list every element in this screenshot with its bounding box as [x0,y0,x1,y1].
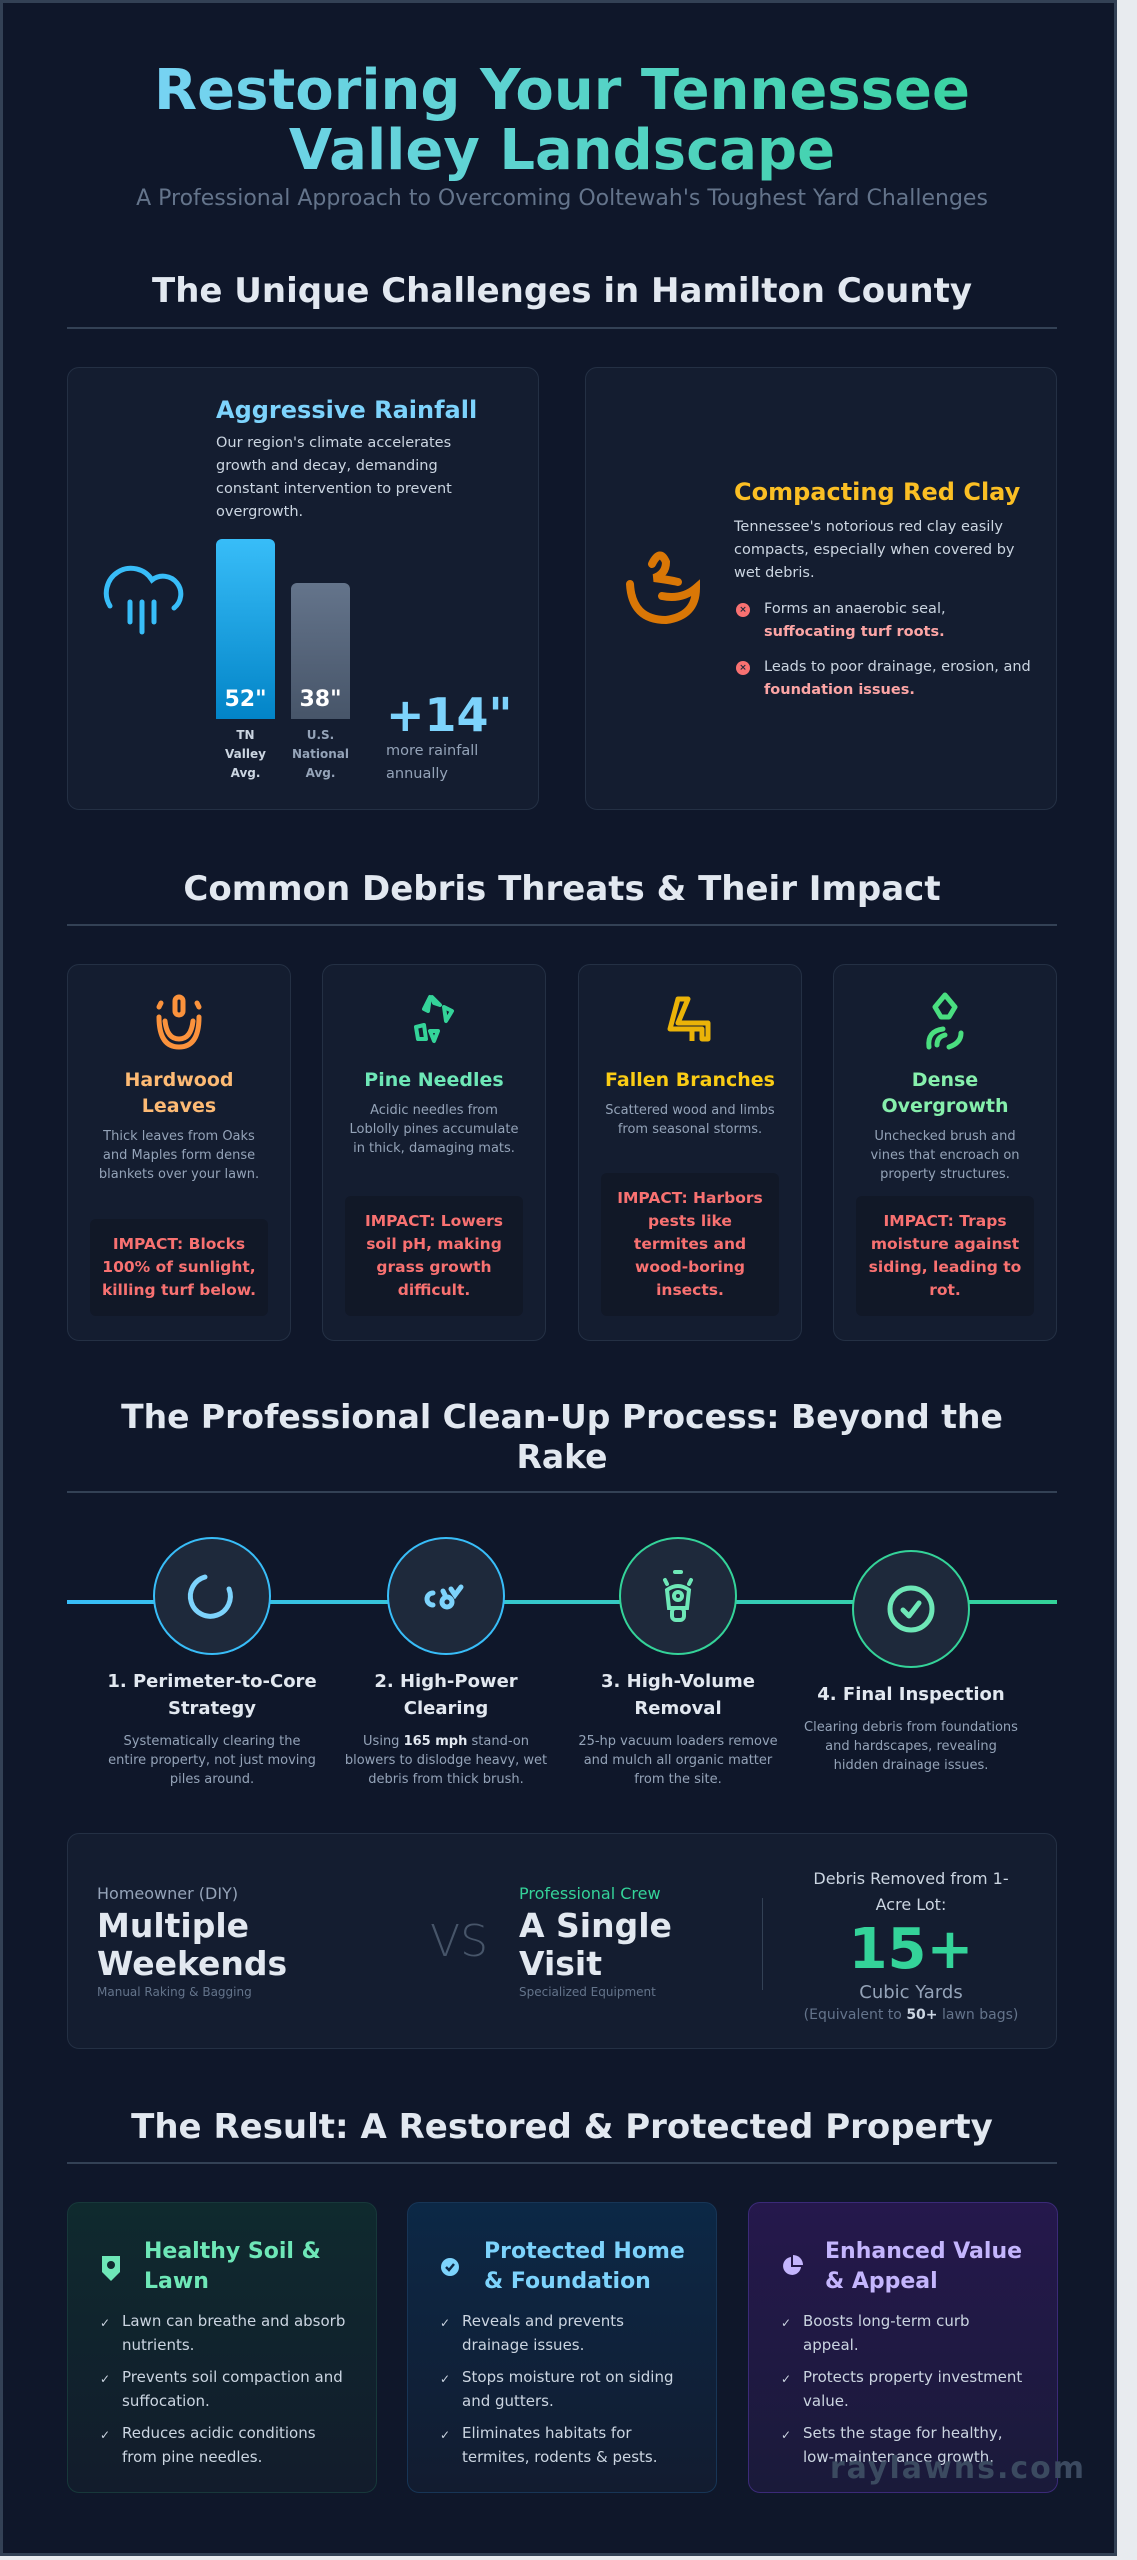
step 3 text: from the site. [634,1772,722,1787]
stat: 15+ cubic yards [804,1869,1018,2023]
card: dense overgrowth: Dense [912,1069,978,1091]
card: hardwood leaves: Thick leaves from Oaks and Maples form dense blankets over your lawn. [99,1129,259,1182]
DIY block: Weekends [97,1944,287,1983]
bar chart: 38" [299,687,342,712]
title: Valley Landscape [289,118,835,183]
heading: compacting red clay: Compacting Red Clay [734,478,1020,506]
list: clay effects [736,601,1031,698]
card: protected home: Eliminates habitats for termites, rodents & pests. [462,2424,657,2466]
card: enhanced value: Protects property investment value. [803,2368,1022,2410]
card: healthy soil [67,2202,377,2493]
card: healthy soil: Lawn [144,2269,209,2294]
card: dense overgrowth: rot. [929,1281,961,1299]
list: clay effects: Leads to poor drainage, erosion, and foundation issues. [764,659,1031,698]
list: clay effects: × [739,663,747,673]
step 4 text: hidden drainage issues. [834,1758,988,1773]
card: dense overgrowth: siding, leading to [869,1258,1021,1276]
card: pine needles: IMPACT: Lowers [365,1212,503,1230]
card: healthy soil: Reduces acidic conditions from pine needles. [122,2424,316,2466]
card: hardwood leaves: Leaves [142,1095,216,1117]
step 2 text: Using 165 mph stand-on [363,1734,529,1749]
card: fallen branches: insects. [656,1281,724,1299]
subtitle: A Professional Approach to Overcoming Ooltewah's Toughest Yard Challenges [136,186,988,211]
stat: 15+ cubic yards: Debris Removed from 1- [813,1869,1009,1888]
card: fallen branches: Fallen Branches [605,1069,775,1091]
panel: red clay [585,367,1057,810]
text: rainfall description: Our region's climate accelerates growth and decay, demanding constant intervention to prevent overgrowth. [216,435,452,520]
step 1 text: piles around. [170,1772,254,1787]
card: fallen branches: wood-boring [635,1258,745,1276]
heading: debris threats: Common Debris Threats & Their Impact [183,869,941,909]
bar chart: Valley [225,747,266,761]
DIY block [97,1884,287,1999]
list: clay effects: Forms an anaerobic seal, suffocating turf roots. [764,601,946,640]
professional block: Specialized Equipment [519,1985,656,1999]
step 4 text [804,1684,1018,1773]
card: dense overgrowth: Overgrowth [882,1095,1008,1117]
step 1 text [107,1671,317,1787]
card: hardwood leaves: killing turf below. [102,1281,256,1299]
timeline line [67,1600,1057,1604]
card: fallen branches: termites and [634,1235,746,1253]
step 1 text: 1. Perimeter-to-Core Strategy [107,1671,317,1719]
step 3 icon [619,1537,737,1655]
card: protected home: Stops moisture rot on siding and gutters. [462,2368,674,2410]
step 2 text: debris from thick brush. [368,1772,524,1787]
card: pine needles [322,964,546,1341]
stat: 15+ cubic yards: Cubic Yards [859,1982,963,2003]
step 4 text: 4. Final Inspection [817,1684,1005,1705]
stat: 15+ cubic yards: 15+ [849,1917,973,1982]
bar chart: National [292,747,349,761]
heading: aggressive rainfall: Aggressive Rainfall [216,396,477,424]
stat: 15+ cubic yards: Acre Lot: [876,1895,946,1914]
bar chart [216,539,350,780]
card: pine needles: Acidic needles from Loblolly pines accumulate in thick, damaging mats. [350,1103,518,1156]
heading: process [121,1397,1003,1476]
card: healthy soil: Healthy Soil & [144,2239,321,2264]
panel: rainfall: annually [386,766,448,782]
card: fallen branches [578,964,802,1341]
card: enhanced value: Enhanced Value [825,2239,1022,2264]
card: healthy soil: Prevents soil compaction and suffocation. [122,2368,343,2410]
professional block [519,1884,672,1999]
step 1 text: entire property, not just moving [108,1753,316,1768]
card: healthy soil: Lawn can breathe and absorb nutrients. [122,2312,345,2354]
panel: DIY vs professional comparison [67,1833,1057,2049]
bar chart: Avg. [306,766,335,780]
card: pine needles: difficult. [398,1281,470,1299]
card: enhanced value: Sets the stage for healthy, low-maintenance growth. [803,2424,1003,2466]
step 4 text: Clearing debris from foundations [804,1720,1018,1735]
icon: rain cloud [104,566,184,634]
card: fallen branches: pests like [648,1212,732,1230]
stat: +14: +14" [386,688,513,742]
card: enhanced value [748,2202,1058,2493]
step 4 icon [852,1550,970,1668]
professional block: Professional Crew [519,1884,661,1903]
step 3 text: 25-hp vacuum loaders remove [578,1734,778,1749]
card: dense overgrowth [833,964,1057,1341]
step 3 text [578,1671,778,1787]
card: hardwood leaves: 100% of sunlight, [102,1258,256,1276]
professional block: A Single [519,1906,672,1945]
DIY block: Multiple [97,1906,249,1945]
step 4 text: and hardscapes, revealing [825,1739,997,1754]
step 2 text [345,1671,547,1787]
card: hardwood leaves [67,964,291,1341]
bar chart: 52" [224,687,267,712]
card: protected home: Protected Home [484,2239,685,2264]
stat: 15+ cubic yards: (Equivalent to 50+ lawn bags) [804,2007,1018,2023]
step 2 text: 2. High-Power Clearing [374,1671,518,1719]
title [67,61,1057,181]
step 2 icon [387,1537,505,1655]
card: fallen branches: IMPACT: Harbors [617,1189,763,1207]
step 3 text: 3. High-Volume Removal [601,1671,755,1719]
title: Restoring Your Tennessee [154,58,970,123]
list: clay effects: × [739,605,747,615]
DIY block: Homeowner (DIY) [97,1884,238,1903]
panel: rainfall [67,367,539,810]
watermark: raylawns.com [830,2451,1086,2486]
card: dense overgrowth: IMPACT: Traps [883,1212,1007,1230]
card: fallen branches: Scattered wood and limbs from seasonal storms. [605,1103,775,1137]
card: hardwood leaves: IMPACT: Blocks [113,1235,245,1253]
step 2 text: blowers to dislodge heavy, wet [345,1753,547,1768]
card: hardwood leaves: Hardwood [125,1069,233,1091]
heading: process: The Professional Clean-Up Process: Beyond the [121,1397,1003,1436]
text: clay description: Tennessee's notorious red clay easily compacts, especially when covered by wet debris. [734,519,1014,581]
card: protected home: Reveals and prevents drainage issues. [462,2312,624,2354]
card: enhanced value: & Appeal [825,2269,938,2294]
bar chart: Avg. [231,766,260,780]
card: pine needles: Pine Needles [364,1069,504,1091]
heading: result: The Result: A Restored & Protected Property [131,2107,993,2147]
card: dense overgrowth: Unchecked brush and vines that encroach on property structures. [870,1129,1020,1182]
DIY block: Manual Raking & Bagging [97,1985,252,1999]
professional block: Visit [519,1944,602,1983]
bar chart: TN [236,728,255,742]
card: enhanced value: Boosts long-term curb appeal. [803,2312,970,2354]
heading: challenges: The Unique Challenges in Hamilton County [152,271,972,311]
card: pine needles: soil pH, making [366,1235,502,1253]
icon: clay [626,552,700,624]
step 1 text: Systematically clearing the [124,1734,300,1749]
card: pine needles: grass growth [376,1258,492,1276]
VS: VS [430,1916,488,1967]
step 1 icon [153,1537,271,1655]
bar chart: U.S. [307,728,334,742]
card: protected home: & Foundation [484,2269,651,2294]
heading: process: Rake [516,1437,608,1476]
step 3 text: and mulch all organic matter [584,1753,772,1768]
panel: rainfall: more rainfall [386,743,478,759]
card: protected home [407,2202,717,2493]
card: dense overgrowth: moisture against [871,1235,1019,1253]
